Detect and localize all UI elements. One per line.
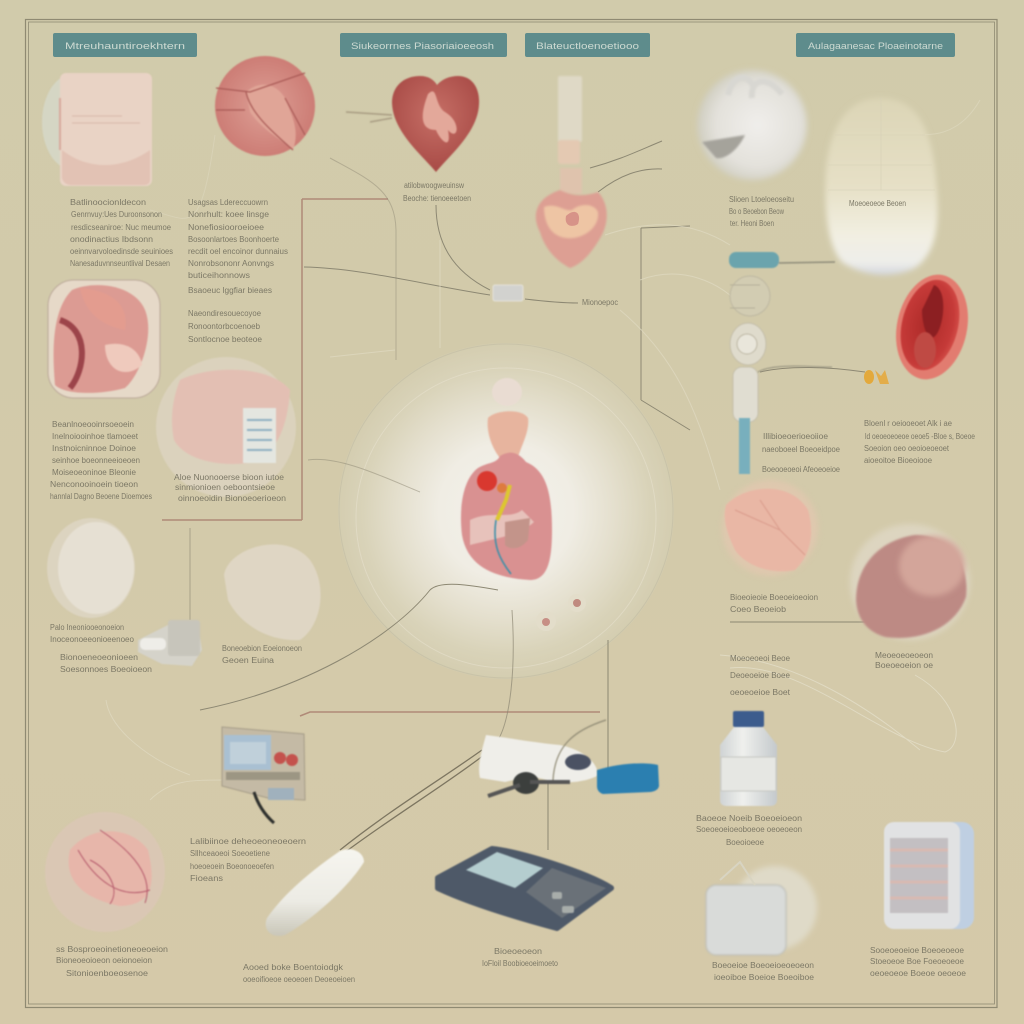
text block: lower left pale oval: [50, 623, 152, 674]
text block: white round part: [729, 195, 906, 228]
central organ illustration: [461, 378, 552, 580]
text block: brown organ caption: Meoeoeoeoeon: [875, 651, 933, 660]
header: right: Aulagaanesac Ploaeinotarne: [808, 41, 943, 52]
text block: below pink tissue: [174, 473, 286, 503]
text block: purifier caption: [870, 946, 967, 978]
text block: column 2: recdit oel encoinor dunnaius: [188, 247, 288, 256]
text block: bottle caption: Baoeoe Noeib Boeoeioeon: [696, 814, 802, 823]
illustration: translucent pack: [706, 862, 817, 955]
text block: lower left pale oval: Bionoeneoeonioeen: [60, 653, 138, 662]
text block: column 1: Nanesaduvnnseuntlival Desaen: [70, 259, 170, 268]
illustration: heart: [346, 76, 479, 172]
text block: lower left organ: Sitonioenboeosenoe: [66, 969, 149, 978]
illustration: pink round tissue: [215, 56, 315, 156]
illustration: small pump: [138, 620, 202, 666]
illustration: monitor device: [222, 727, 305, 823]
text block: monitor caption: Fioeans: [190, 874, 223, 883]
text block: meter caption: [482, 947, 558, 968]
text block: bottle caption: [696, 814, 802, 847]
text block: bottle caption: Boeoioeoe: [726, 838, 765, 847]
connector lines: [106, 100, 980, 853]
text block: white round part: Slioen Ltoeloeoseitu: [729, 195, 794, 204]
text block: column 1: oeinnvarvoloedinsde seuinioes: [70, 247, 173, 256]
header: center left: Siukeorrnes Piasoriaioeeosh: [351, 41, 494, 52]
text block: kidney caption: ld oeoeoeoeoe oeoe5 -Bloe s, Boeoe: [865, 432, 975, 441]
text block: heart caption: Beoche: tienoeeetoen: [403, 194, 471, 203]
text block: heart caption: [403, 181, 471, 203]
text block: lower left pale oval: Inoceonoeeonioeenoeo: [50, 635, 135, 644]
text block: kidney caption: aioeoitoe Bioeoiooe: [864, 456, 933, 465]
text block: center right notes: Moeoeoeoi Beoe: [730, 654, 791, 663]
text block: lower left organ: ss Bosproeoinetioneoeoeion: [56, 945, 168, 954]
text block: pink dome caption: [730, 593, 818, 614]
illustration: pink tissue with chart: [156, 357, 296, 497]
text block: monitor caption: Sllhceaoeoi Soeoetiene: [190, 849, 271, 858]
text block: white round part: ter. Heoni Boen: [730, 219, 774, 228]
small round cells: [536, 594, 586, 631]
text block: monitor caption: [190, 837, 306, 883]
text block: pink dome caption: Coeo Beoeiob: [730, 605, 787, 614]
text block: brown organ caption: Boeoeoeion oe: [875, 661, 934, 670]
illustration: white pen device: [266, 849, 364, 936]
central glow circle: [338, 343, 674, 679]
text block: pump caption: Boneoebion Eoeionoeon: [222, 644, 302, 653]
text block: purifier caption: Stoeoeoe Boe Foeoeoeoe: [870, 957, 965, 966]
text block: below pink tissue: sinmionioen oeboontsieoe: [175, 483, 276, 492]
small connector box: [493, 285, 523, 301]
illustration: brown round organ: [850, 524, 970, 640]
text block: bottle caption: Soeoeoeioeoboeoe oeoeoeon: [696, 825, 802, 834]
header: left: Mtreuhauntiroekhtern: [65, 41, 185, 52]
text block: left middle: Instnoicninnoe Doinoe: [52, 444, 137, 453]
text block: column 2: [188, 198, 288, 344]
text block: column 1: onodinactius Ibdsonn: [70, 235, 153, 244]
text block: column 1: Batlinoocionldecon: [70, 198, 146, 207]
text block: column 2: Bsaoeuc lggfiar bieaes: [188, 286, 272, 295]
text block: column 2: Nonrhult: koee linsge: [188, 210, 270, 219]
text block: pump caption: Geoen Euina: [222, 656, 275, 665]
text block: column 2: buticeihonnows: [188, 271, 250, 280]
text block: device column: [762, 432, 841, 474]
illustration: white cuff with sensor: [479, 720, 606, 796]
illustration: blue tube and device column: [729, 252, 835, 474]
illustration: air purifier box: [884, 822, 974, 929]
text block: left middle: hannlal Dagno Beoene Dioemoes: [50, 492, 152, 501]
text block: center right notes: [730, 654, 791, 697]
text block: pen caption: Aooed boke Boentoiodgk: [243, 963, 344, 972]
text block: column 2: Sontlocnoe beoteoe: [188, 335, 263, 344]
text block: purifier caption: Sooeoeoeioe Boeoeoeoe: [870, 946, 965, 955]
text block: column 2: Naeondiresouecoyoe: [188, 309, 262, 318]
illustration: spine and lower heart: [536, 76, 607, 268]
text block: device column: Boeooeoeoi Afeoeoeioe: [762, 465, 841, 474]
illustration: pale tissue panel: [42, 73, 152, 186]
text block: kidney caption: Soeoion oeo oeoioeoeoet: [864, 444, 950, 453]
illustration: pink dome right: [722, 480, 818, 576]
text block: column 1: [70, 198, 173, 268]
text block: device column: Illibioeoerioeoiioe: [763, 432, 829, 441]
text block: column 2: Nonrobsononr Aonvngs: [188, 259, 274, 268]
text block: below pink tissue: Aloe Nuonooerse bioon iutoe: [174, 473, 285, 482]
text block: kidney caption: Bloenl r oeiooeoet Alk i ae: [864, 419, 953, 428]
text block: monitor caption: Lalibiinoe deheoeoneoeoern: [190, 837, 306, 846]
text block: column 2: Usagsas Ldereccuowrn: [188, 198, 268, 207]
header: center left: [340, 33, 507, 57]
illustration: red kidney: [887, 268, 977, 386]
text block: center right notes: Deoeoeioe Boee: [730, 671, 791, 680]
text block: column 1: resdicseaniroe: Nuc meumoe: [71, 223, 172, 232]
text block: left middle: Beanlnoeooinrsoeoein: [52, 420, 134, 429]
text block: column 1: Genrnvuy:Ues Duroonsonon: [71, 210, 162, 219]
text block: white round part: Moeoeoeoe Beoen: [849, 199, 906, 208]
text block: column 2: Ronoontorbcoenoeb: [188, 322, 261, 331]
illustration: handheld meter: [438, 849, 611, 928]
text block: kidney caption: [864, 419, 975, 465]
text block: pack caption: Boeoeioe Boeoeioeoeoeon: [712, 961, 814, 970]
text block: below pink tissue: oinnoeoidin Bionoeoerioeon: [178, 494, 286, 503]
text block: lower left organ: Bioneoeoioeon oeionoeion: [56, 956, 152, 965]
text block: pack caption: ioeoiboe Boeioe Boeoiboe: [714, 973, 815, 982]
text block: left middle: [50, 420, 152, 501]
text label: center callout: Mionoepoc: [582, 298, 618, 307]
text block: pack caption: [712, 961, 815, 982]
text block: left middle: Moiseoeoninoe Bleonie: [52, 468, 137, 477]
header: right: [796, 33, 955, 57]
illustration: white round part: [697, 70, 807, 180]
text block: heart caption: atilobwoogweuinsw: [404, 181, 464, 190]
text block: left middle: seinhoe boeonneeioeoen: [52, 456, 140, 465]
text block: lower left pale oval: Palo Ineoniooeonoeion: [50, 623, 124, 632]
header: center right: [525, 33, 650, 57]
text block: center right notes: oeoeoeioe Boet: [730, 688, 791, 697]
text block: left middle: Nenconooinoein tioeon: [50, 480, 138, 489]
text block: device column: naeoboeel Boeoeidpoe: [762, 445, 841, 454]
text block: white round part: Bo o Beoebon Beow: [729, 207, 784, 216]
text block: pink dome caption: Bioeoieoie Boeoeioeoion: [730, 593, 818, 602]
illustration: white bottle: [720, 711, 777, 806]
text block: column 2: Bosoonlartoes Boonhoerte: [188, 235, 280, 244]
text block: pen caption: ooeoifioeoe oeoeoen Deoeoeioen: [243, 975, 355, 984]
text block: meter caption: Bioeoeoeon: [494, 947, 542, 956]
text block: lower left pale oval: Soesonnoes Boeoioeon: [60, 665, 152, 674]
text block: purifier caption: oeoeoeoe Boeoe oeoeoe: [870, 969, 967, 978]
text block: pump caption: [222, 644, 302, 665]
text block: column 2: Nonefiosiooroeioee: [188, 223, 265, 232]
text block: pen caption: [243, 963, 355, 984]
text block: meter caption: IoFloil Boobioeoeimoeto: [482, 959, 558, 968]
text block: left middle: Inelnoiooinhoe tlamoeet: [52, 432, 139, 441]
illustration: heart organ panel left: [48, 280, 160, 398]
header: center right: Blateuctloenoetiooo: [536, 41, 639, 52]
header: left: [53, 33, 197, 57]
text block: lower left organ: [56, 945, 168, 978]
illustration: lower left organ: [45, 812, 165, 932]
illustration: pale capsule: [825, 98, 938, 275]
illustration: pale ovals left: [47, 518, 321, 640]
text block: brown organ caption: [875, 651, 934, 670]
text block: monitor caption: hoeoeoein Boeonoeoefen: [190, 862, 274, 871]
icon: yellow droplets: [864, 370, 889, 384]
illustration: blue case: [597, 763, 659, 794]
